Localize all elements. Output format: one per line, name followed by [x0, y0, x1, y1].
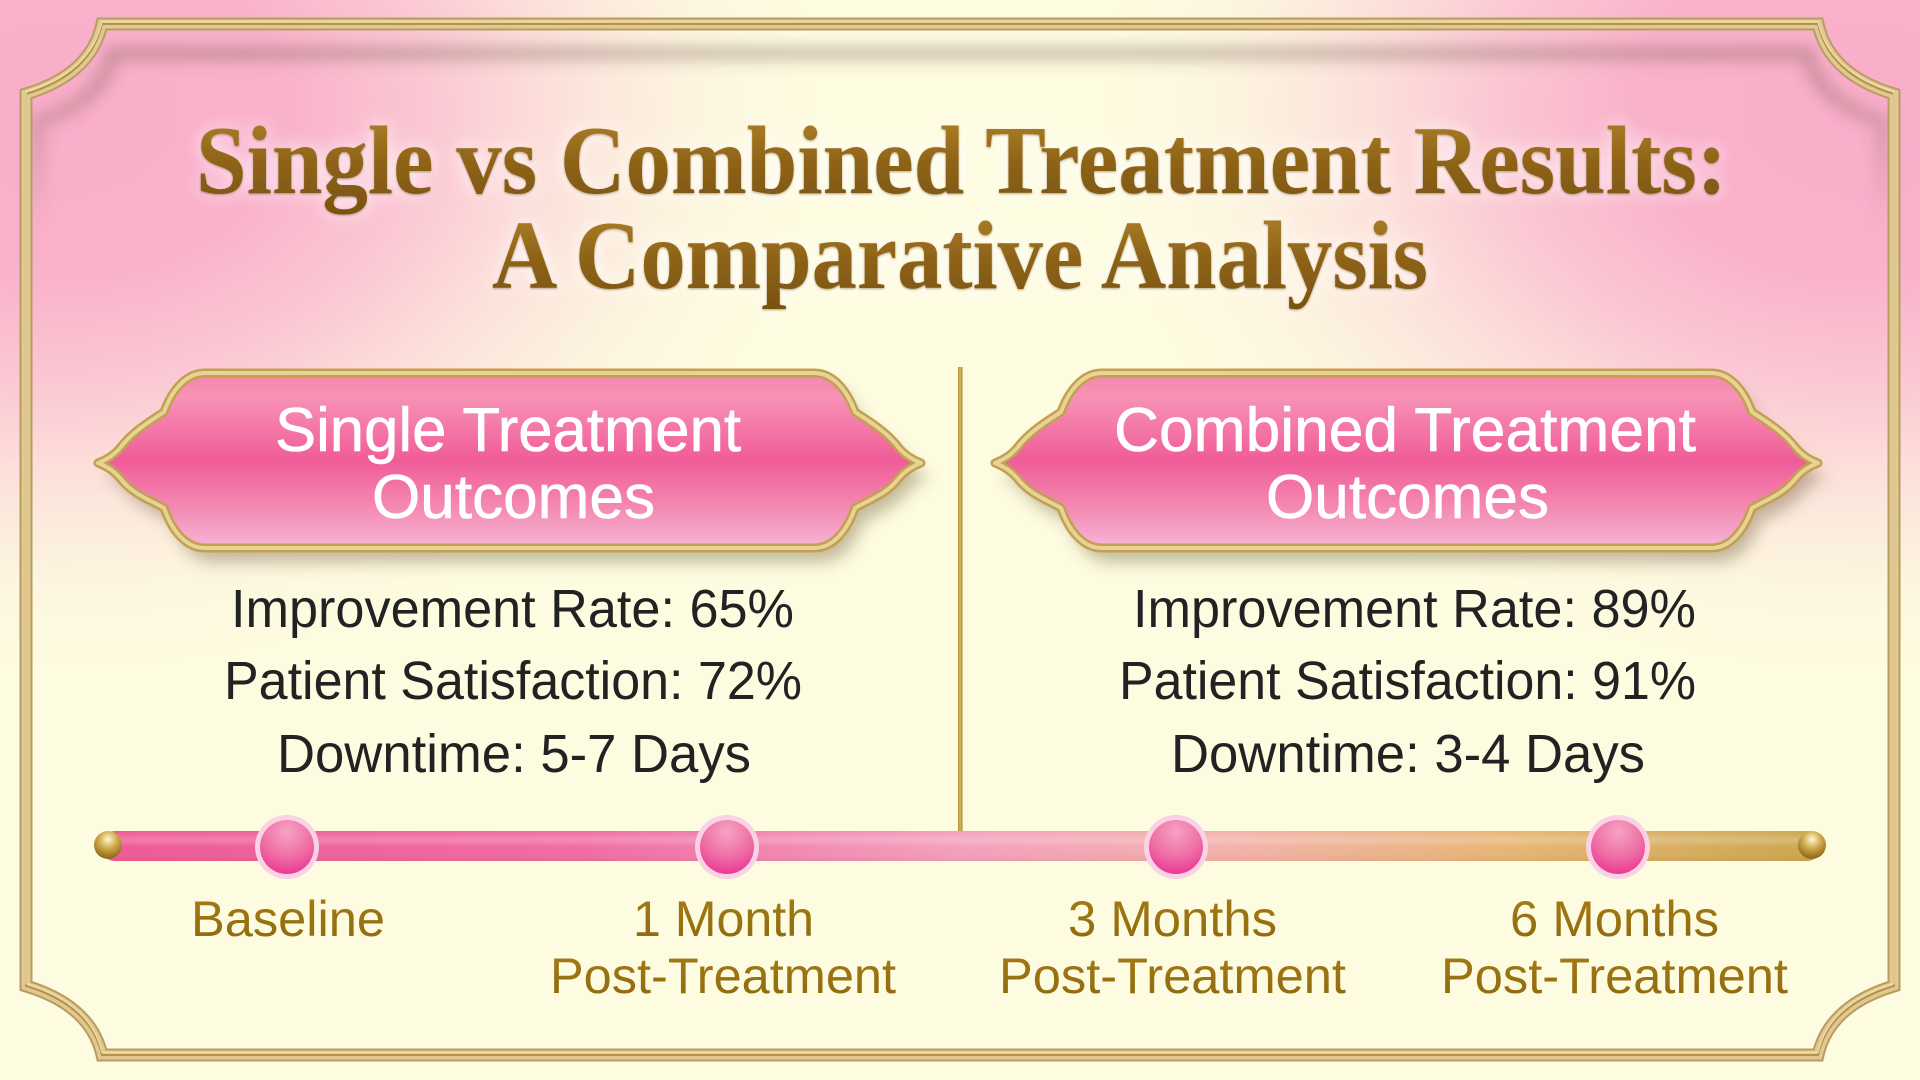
panel: combined treatment [995, 373, 1826, 784]
banner: combined treatment outcomes: Outcomes [1266, 463, 1549, 532]
timeline bar [100, 831, 1822, 861]
combined treatment statistics: Patient Satisfaction: 91% [1119, 651, 1696, 711]
banner: combined treatment outcomes [995, 373, 1826, 562]
milestone: 6 months: 6 Months [1510, 891, 1719, 947]
single treatment statistics: Patient Satisfaction: 72% [224, 651, 802, 711]
banner: combined treatment outcomes: Combined Treatment [1114, 396, 1696, 465]
banner: single treatment outcomes: Single Treatment [275, 396, 741, 465]
title: A Comparative Analysis [492, 202, 1428, 310]
single treatment statistics [224, 579, 802, 784]
milestone: 3 months [999, 815, 1346, 1004]
milestone: 1 month: 1 Month [633, 891, 814, 947]
single treatment statistics: Improvement Rate: 65% [231, 579, 794, 639]
single treatment statistics: Downtime: 5-7 Days [277, 724, 751, 784]
milestone: baseline: Baseline [191, 891, 385, 947]
title: A Comparative Analysis [492, 202, 1428, 310]
timeline start cap [94, 831, 122, 859]
title: Single vs Combined Treatment Results: [196, 107, 1727, 215]
combined treatment statistics: Downtime: 3-4 Days [1171, 724, 1645, 784]
milestone: 6 months [1441, 815, 1788, 1004]
milestone: baseline [191, 815, 385, 947]
title: Single vs Combined Treatment Results: [196, 107, 1727, 215]
banner: single treatment outcomes [98, 373, 929, 562]
banner: single treatment outcomes: Outcomes [372, 463, 655, 532]
milestone: 1 month [550, 815, 896, 1004]
milestone: 3 months: Post-Treatment [999, 948, 1346, 1004]
milestone: 1 month: Post-Treatment [550, 948, 896, 1004]
milestone: 3 months: 3 Months [1068, 891, 1277, 947]
timeline end cap [1798, 831, 1826, 859]
combined treatment statistics: Improvement Rate: 89% [1133, 579, 1696, 639]
center divider [958, 367, 962, 832]
panel: single treatment [98, 373, 929, 784]
timeline [94, 815, 1826, 1004]
combined treatment statistics [1119, 579, 1696, 784]
milestone: 6 months: Post-Treatment [1441, 948, 1788, 1004]
title [196, 107, 1727, 310]
